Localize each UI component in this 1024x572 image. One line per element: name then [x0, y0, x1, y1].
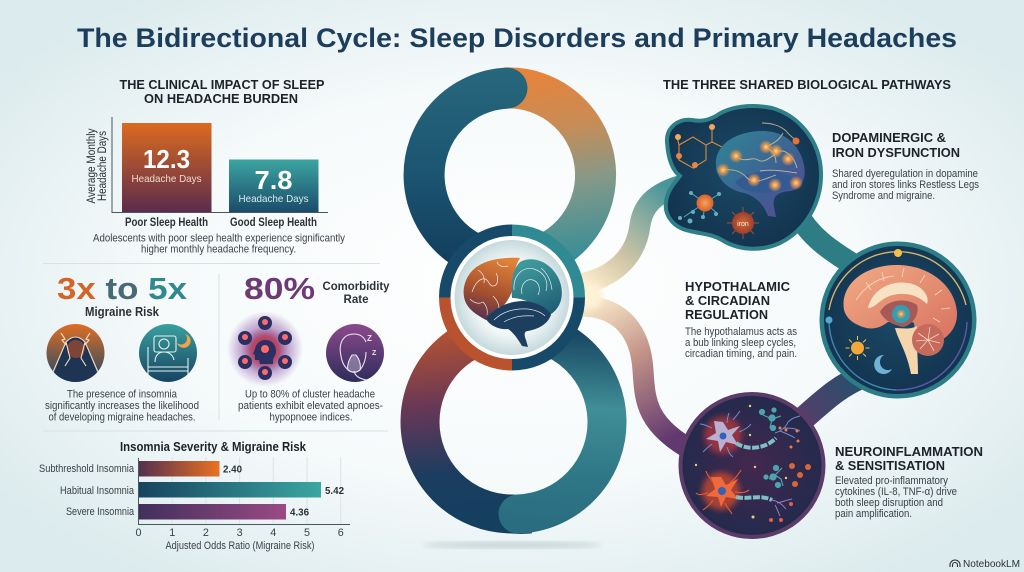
text: hypothalamic: a bub linking sleep cycles,: [685, 337, 796, 349]
bar: severe: Severe Insomnia: [66, 506, 134, 518]
bar: poor sleep: Headache Days: [132, 173, 202, 185]
brain cross-section: [844, 265, 957, 374]
bar: habitual: 5.42: [325, 485, 344, 497]
connector: centre to neuroinflammation pathway: [580, 306, 695, 452]
bar: subthreshold: Subthreshold Insomnia: [39, 463, 134, 475]
molecule: dopamine: [675, 124, 731, 168]
circadian ring: [826, 249, 967, 390]
text: neuroinflammation: both sleep disruption and: [835, 497, 943, 509]
bar: habitual: [60, 482, 344, 498]
icon: iron particle: iron: [737, 221, 749, 228]
icon: moon: [874, 355, 892, 374]
text: hypothalamic: HYPOTHALAMIC: [685, 279, 791, 294]
heading: clinical impact: THE CLINICAL IMPACT OF SLEEP: [120, 77, 325, 92]
label: migraine risk: Migraine Risk: [85, 305, 159, 319]
axis ticks: 4: [270, 527, 276, 539]
text: neuroinflammation: Elevated pro-inflammatory: [835, 475, 949, 487]
bar labels: Poor Sleep Health: [125, 217, 208, 229]
icon: head in pain: [46, 324, 104, 382]
label: comorbidity rate: Comorbidity: [322, 279, 390, 293]
heading: clinical impact: [120, 77, 325, 106]
bubble: neuroinflammation: [678, 392, 826, 539]
text: neuroinflammation: cytokines (IL-8, TNF-α) drive: [835, 486, 957, 498]
panel: migraine risk: [45, 271, 199, 424]
label: comorbidity rate: [322, 279, 390, 306]
y axis label: Average Monthly: [86, 128, 98, 204]
text: insomnia: significantly increases the likelihood: [45, 400, 199, 412]
bar: severe: [66, 504, 309, 520]
icon: sleep apnoea mask: [326, 324, 384, 382]
bar: severe: 4.36: [290, 506, 309, 518]
text: cluster headache: Up to 80% of cluster headache: [245, 388, 375, 400]
bar: good sleep: [229, 160, 318, 212]
panel: insomnia severity chart: [39, 439, 350, 552]
heading: clinical impact: ON HEADACHE BURDEN: [144, 91, 298, 106]
panel: clinical impact: [86, 77, 346, 256]
connector: dopaminergic to circadian: [795, 210, 870, 275]
chart title: Insomnia Severity & Migraine Risk: [120, 439, 307, 454]
text: dopaminergic: Syndrome and migraine.: [832, 190, 935, 202]
bar: poor sleep: 12.3: [143, 144, 190, 174]
text: hypothalamic: The hypothalamus acts as: [685, 326, 798, 338]
bar: subthreshold: [39, 461, 242, 476]
text: insomnia: [45, 388, 199, 424]
connector: circadian to neuroinflammation: [790, 375, 865, 430]
central brain hub: [445, 230, 579, 364]
text: insomnia: The presence of insomnia: [67, 388, 177, 400]
bar: good sleep: Headache Days: [238, 193, 308, 205]
caption: clinical impact: [93, 232, 346, 256]
caption: clinical impact: higher monthly headache frequency.: [141, 244, 296, 256]
text: neuroinflammation: & SENSITISATION: [835, 458, 945, 473]
text: hypothalamic: REGULATION: [685, 307, 768, 322]
axis ticks: [135, 527, 344, 539]
bubble: dopaminergic and iron: [666, 106, 821, 249]
axis ticks: 5: [304, 527, 310, 539]
brain illustration: [716, 123, 805, 217]
text: neuroinflammation: [835, 444, 983, 520]
y axis label: [86, 128, 109, 204]
stat: 3x to 5x: 3x to 5x: [57, 271, 188, 306]
text: insomnia: of developing migraine headaches.: [48, 412, 196, 424]
icon: cluster of heads: [227, 311, 303, 387]
caption: clinical impact: Adolescents with poor sleep health experience significantly: [93, 232, 346, 244]
icon: sun: [846, 336, 870, 360]
heading: three shared pathways: THE THREE SHARED BIOLOGICAL PATHWAYS: [663, 77, 951, 92]
y axis label: Headache Days: [97, 131, 109, 201]
text: hypothalamic: [685, 279, 798, 360]
neuron: lower: [696, 470, 793, 522]
bar: poor sleep: [122, 123, 212, 212]
horizontal bar chart: [39, 457, 350, 552]
bar chart: headache days: [112, 117, 328, 229]
bubble: hypothalamic and circadian: [820, 242, 976, 398]
neuron: upper: [700, 411, 800, 457]
bar labels: Good Sleep Health: [230, 217, 317, 229]
axis ticks: 6: [338, 527, 344, 539]
text: dopaminergic: Shared dyeregulation in dopamine: [832, 168, 978, 180]
text: dopaminergic: IRON DYSFUNCTION: [832, 145, 960, 160]
axis ticks: 1: [169, 527, 175, 539]
bar: habitual: Habitual Insomnia: [60, 485, 134, 497]
connector: centre to dopaminergic pathway: [580, 182, 695, 284]
axis ticks: 3: [237, 527, 243, 539]
text: cluster headache: [238, 388, 383, 424]
axis ticks: 2: [203, 527, 209, 539]
cytokine molecules: [695, 405, 811, 518]
figure-eight cycle: [420, 88, 607, 548]
lower loop: [420, 330, 607, 514]
icon: brain: [464, 258, 562, 347]
text: hypothalamic: circadian timing, and pain.: [685, 348, 797, 360]
axis label: Adjusted Odds Ratio (Migraine Risk): [166, 540, 314, 552]
bar: good sleep: 7.8: [254, 165, 292, 195]
icon: sleep apnoea mask: Z: [372, 350, 377, 357]
upper loop: [424, 88, 596, 262]
panel: comorbidity: [227, 271, 390, 424]
title: The Bidirectional Cycle: Sleep Disorders and Primary Headaches: [77, 23, 957, 53]
label: comorbidity rate: Rate: [344, 292, 369, 306]
connector glow: [577, 283, 603, 309]
text: cluster headache: hypopnoee indices.: [270, 412, 352, 424]
stat: 80%: 80%: [244, 271, 315, 306]
text: cluster headache: patients exhibit elevated apnoes-: [238, 400, 383, 412]
text: dopaminergic: and iron stores links Restless Legs: [832, 179, 980, 191]
molecule: orange sphere: [678, 191, 721, 224]
text: dopaminergic: DOPAMINERGIC &: [832, 130, 946, 145]
axis ticks: 0: [135, 527, 142, 539]
icon: sleep apnoea mask: Z: [367, 334, 372, 343]
logo: NotebookLM: NotebookLM: [963, 558, 1020, 570]
text: neuroinflammation: NEUROINFLAMMATION: [835, 444, 983, 459]
bar labels: [125, 217, 317, 229]
icon: iron particle: [727, 207, 759, 239]
bar: subthreshold: 2.40: [223, 464, 242, 476]
text: dopaminergic: [832, 130, 980, 202]
icon: person awake in bed: [139, 324, 197, 382]
text: neuroinflammation: pain amplification.: [835, 508, 912, 520]
text: hypothalamic: & CIRCADIAN: [685, 293, 770, 308]
